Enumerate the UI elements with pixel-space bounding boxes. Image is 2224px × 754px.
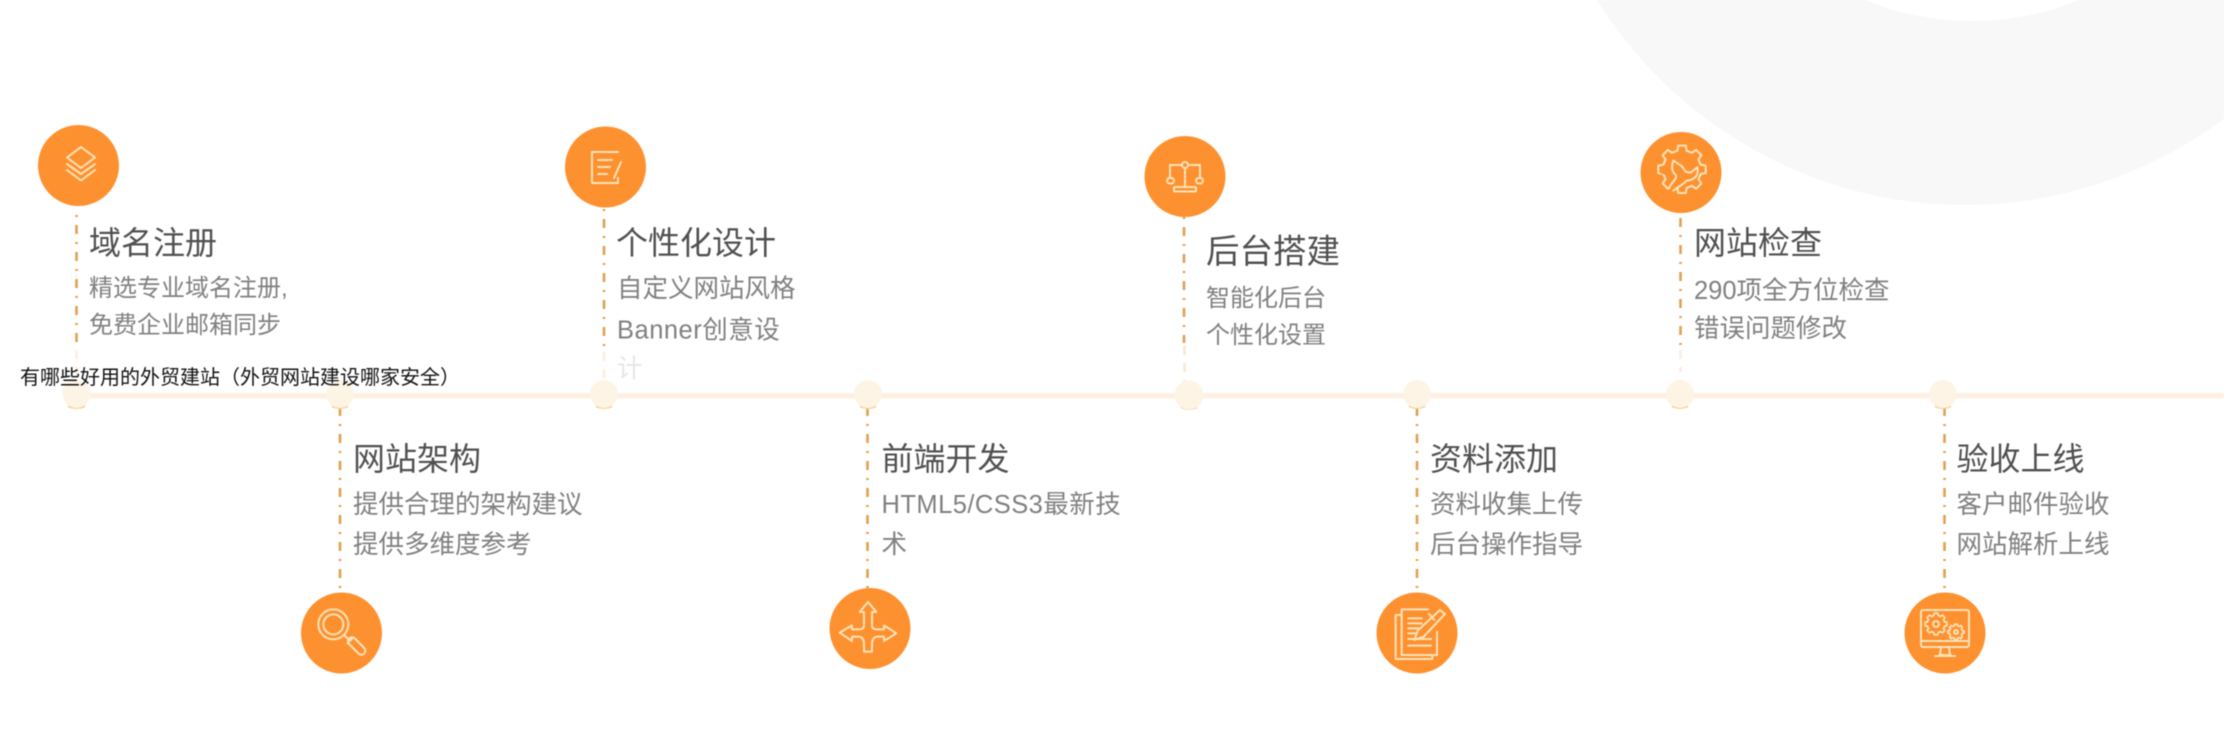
description 5: 个性化设置 (1206, 322, 1326, 349)
icon: monitor with gears (1904, 592, 1986, 674)
description 6: 资料收集上传 (1430, 491, 1583, 519)
timeline dot 8 (1929, 380, 1957, 408)
heading: 域名注册: 域名注册 (89, 225, 217, 261)
heading: 前端开发: 前端开发 (882, 441, 1010, 477)
icon: gear and wrench (1640, 132, 1722, 213)
description 2 (353, 491, 583, 559)
description 6 (1430, 491, 1583, 559)
connector 3 (603, 209, 605, 378)
timeline dot 6 (1403, 380, 1431, 408)
icon: notes and pen (1376, 592, 1458, 674)
description 8 (1956, 491, 2110, 559)
description 1 (89, 275, 288, 339)
step 1: domain registration (38, 125, 288, 408)
icon: balance scale (1144, 136, 1226, 217)
description 1: 精选专业域名注册, (89, 275, 288, 302)
description 3: Banner创意设 (617, 316, 780, 344)
connector 8 (1943, 407, 1946, 592)
description 1: 免费企业邮箱同步 (89, 312, 281, 339)
heading: 后台搭建: 后台搭建 (1206, 234, 1340, 271)
timeline dot 4 (854, 380, 882, 408)
heading: 网站架构: 网站架构 (353, 441, 481, 477)
step 5: back-end setup (1144, 136, 1340, 410)
description 3: 自定义网站风格 (617, 275, 796, 303)
connector 2 (339, 407, 341, 592)
icon: magnifier (301, 592, 382, 674)
step 3: personalized design (565, 126, 796, 408)
description 7 (1694, 277, 1890, 343)
heading: 网站检查: 网站检查 (1694, 225, 1822, 261)
description 5: 智能化后台 (1206, 285, 1326, 312)
step 8: acceptance and launch (1904, 380, 2110, 674)
description 3 (617, 275, 796, 383)
description 6: 后台操作指导 (1430, 531, 1583, 559)
timeline dot 3 (590, 380, 618, 408)
icon: stacked layers (38, 125, 119, 206)
overlay caption: 有哪些好用的外贸建站（外贸网站建设哪家安全） (20, 366, 460, 389)
heading: 资料添加: 资料添加 (1430, 441, 1558, 477)
icon: three-way arrows (830, 588, 910, 669)
step 2: site architecture (301, 380, 583, 674)
timeline dot 5 (1174, 380, 1204, 410)
timeline axis (76, 393, 2224, 398)
description 8: 客户邮件验收 (1956, 491, 2110, 519)
step 6: content upload (1376, 380, 1583, 674)
description 7: 错误问题修改 (1694, 315, 1847, 343)
description 7: 290项全方位检查 (1694, 277, 1890, 305)
description 8: 网站解析上线 (1956, 531, 2110, 559)
description 4 (882, 491, 1121, 559)
description 3: 计 (617, 355, 643, 383)
description 4: HTML5/CSS3最新技 (882, 491, 1121, 519)
timeline dot 1 (62, 380, 90, 408)
connector 6 (1416, 407, 1418, 592)
description 2: 提供多维度参考 (353, 531, 532, 559)
timeline dot 2 (326, 380, 354, 408)
icon: document and pen (565, 126, 646, 208)
heading: 验收上线: 验收上线 (1956, 441, 2085, 477)
heading: 个性化设计: 个性化设计 (616, 225, 776, 261)
description 5 (1206, 285, 1326, 349)
background ring (1528, 0, 2224, 205)
connector 7 (1679, 218, 1682, 372)
description 2: 提供合理的架构建议 (353, 491, 583, 519)
connector 4 (866, 407, 869, 588)
description 4: 术 (882, 531, 907, 559)
connector 5 (1183, 217, 1186, 383)
step 4: front-end development (830, 380, 1121, 669)
step 7: website check (1640, 132, 1890, 408)
timeline dot 7 (1666, 380, 1694, 408)
connector 1 (75, 215, 78, 385)
